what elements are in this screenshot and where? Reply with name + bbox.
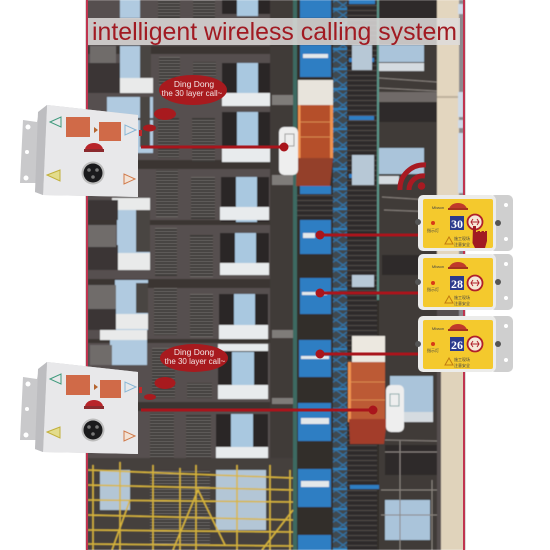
lift car lower [348, 336, 404, 444]
speech bubble upper [143, 75, 227, 132]
call button 30: Mbaon [432, 205, 444, 210]
call button 26: 注意安全 [454, 362, 470, 368]
icon: pressing hand [472, 226, 487, 248]
call button 26: 指示灯 [427, 347, 439, 353]
building photo [86, 0, 465, 550]
floor bands [88, 46, 293, 411]
mullions [107, 46, 153, 313]
call button 28: 注意安全 [454, 300, 470, 306]
beige column [437, 0, 459, 262]
left glass windows [98, 0, 153, 515]
call button 30: 注意安全 [454, 241, 470, 247]
call button 28: 施工现场 [454, 294, 470, 300]
call button 30: 施工现场 [454, 235, 470, 241]
icon: wifi signal [400, 165, 426, 190]
call button 28: 指示灯 [427, 286, 439, 292]
title: intelligent wireless calling system [92, 18, 457, 46]
left balconies [88, 63, 120, 330]
call button 28: Mbaon [432, 264, 444, 269]
call button 26: 26 [451, 338, 463, 352]
receiver device upper [20, 105, 142, 197]
louvres [150, 0, 216, 465]
scaffold [88, 458, 293, 550]
call button 30: 30 [451, 217, 463, 231]
slatted floors [297, 0, 377, 550]
speech bubble lower [144, 344, 228, 400]
lift car upper [279, 80, 333, 186]
call button 28: 28 [451, 277, 463, 291]
speech bubble upper: the 30 layer call~ [162, 89, 223, 98]
right facade [379, 0, 437, 550]
speech bubble upper: Ding Dong [174, 79, 214, 89]
call button 30 [415, 195, 513, 251]
blue panels [298, 0, 331, 550]
tower [270, 0, 293, 550]
title band [88, 18, 460, 46]
call button 26: Mbaon [432, 326, 444, 331]
connector lines and dots [141, 142, 420, 414]
photo border lines [86, 0, 465, 550]
receiver device lower [20, 362, 142, 454]
call button 28 [415, 254, 513, 310]
mast [333, 0, 347, 550]
call button 30: 指示灯 [427, 227, 439, 233]
call button 26: 施工现场 [454, 356, 470, 362]
speech bubble lower: Ding Dong [174, 347, 214, 357]
central windows [216, 0, 270, 462]
speech bubble lower: the 30 layer call~ [165, 357, 226, 366]
call button 26 [415, 316, 513, 372]
